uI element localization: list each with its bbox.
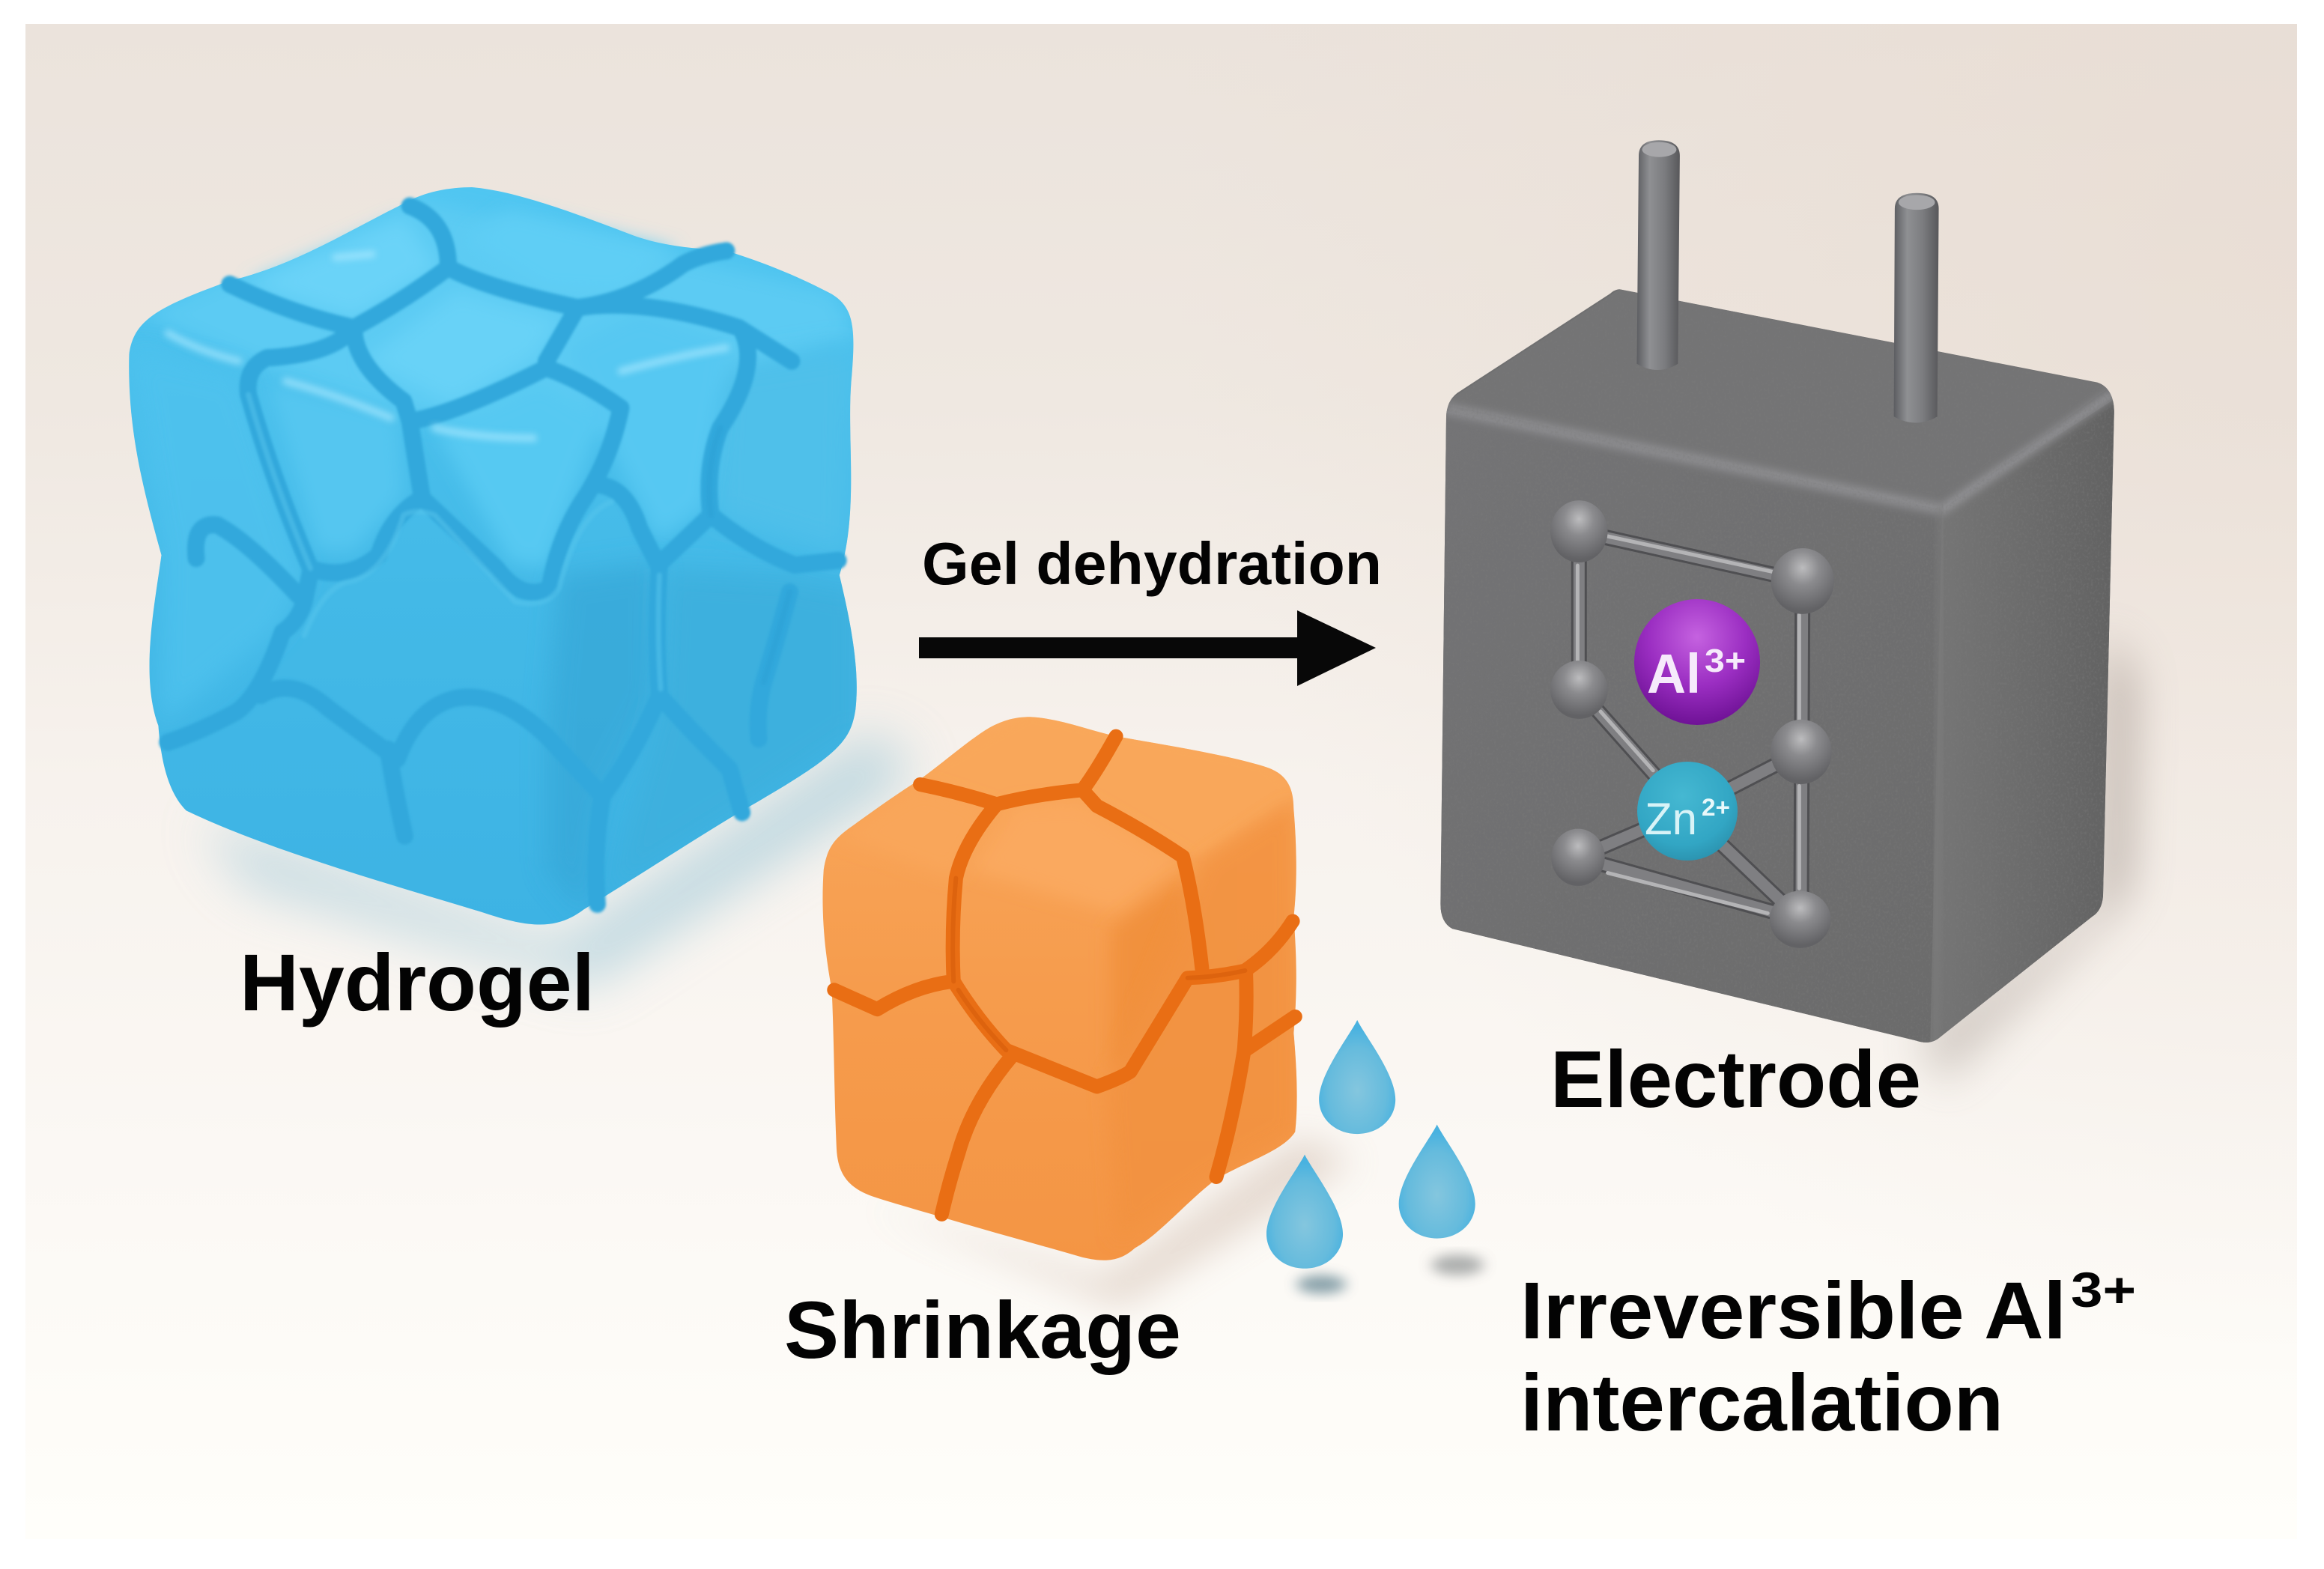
orange cube cracks — [834, 736, 1295, 1214]
ion: Zn2+: Zn — [1645, 794, 1697, 844]
label: Electrode: Electrode — [1550, 1034, 1921, 1124]
ion: Al3+: 3+ — [1705, 643, 1746, 679]
ion: Zn2+: 2+ — [1702, 794, 1730, 821]
ion: Zn2+ — [1637, 762, 1738, 861]
hydrogel cracks network — [168, 206, 838, 904]
gel surface highlights — [168, 254, 726, 438]
hydrogel shadow — [198, 735, 919, 983]
hydrogel cube — [129, 187, 919, 983]
droplet shadows — [1296, 1254, 1484, 1294]
electrode body — [1433, 280, 2121, 1050]
arrow: gel dehydration direction — [919, 610, 1376, 686]
droplet top — [1319, 1020, 1395, 1134]
crystal lattice rods — [1577, 532, 1803, 920]
shrunken orange cube — [822, 714, 1350, 1308]
terminal pin right — [1894, 193, 1939, 422]
hydrogel raised cells — [249, 210, 729, 568]
hydrogel body — [129, 187, 860, 925]
orange cube shadow — [873, 1136, 1350, 1308]
label: Irreversible Al3+ intercalation — [1520, 1262, 2136, 1448]
label: Irreversible Al3+ intercalation: 3+ — [2071, 1262, 2136, 1317]
ion: Al3+ — [1634, 599, 1760, 725]
label: Hydrogel: Hydrogel — [240, 937, 595, 1028]
orange cube body — [822, 714, 1297, 1260]
terminal pin left — [1636, 140, 1680, 370]
label: Shrinkage: Shrinkage — [784, 1284, 1181, 1375]
droplet right — [1399, 1124, 1475, 1239]
ion: Al3+: Al — [1647, 643, 1701, 705]
label: Irreversible Al3+ intercalation: intercalation — [1520, 1357, 2003, 1448]
lattice nodes — [1550, 500, 1834, 948]
electrode shadow — [1911, 640, 2141, 1075]
droplet bottom left — [1266, 1155, 1343, 1269]
electrode block — [1433, 140, 2141, 1075]
process label: Gel dehydration: Gel dehydration — [922, 530, 1382, 597]
label: Irreversible Al3+ intercalation: Irreversible Al — [1520, 1265, 2066, 1356]
water droplets — [1266, 1020, 1484, 1294]
